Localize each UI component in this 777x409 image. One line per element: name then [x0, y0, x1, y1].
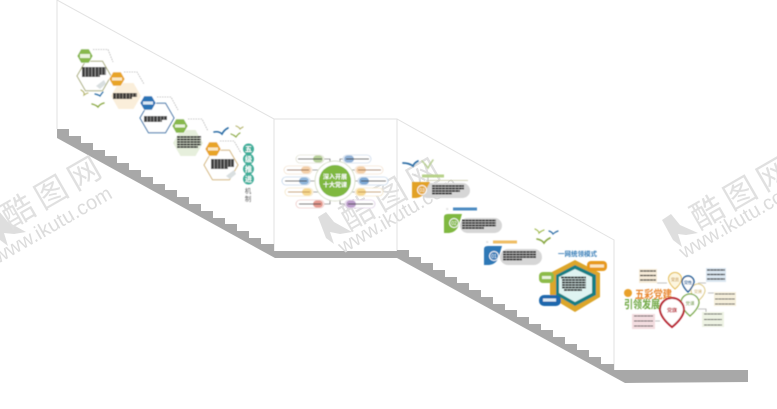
- vertical title: 进: [245, 174, 252, 184]
- vertical title: [243, 144, 254, 203]
- heading: 引领发展: [624, 297, 660, 311]
- pin: green: 党课: [686, 300, 695, 307]
- hexagon step 4: [172, 119, 208, 156]
- item 01: “: [486, 241, 489, 247]
- heading: [624, 287, 672, 311]
- text boxes: [632, 268, 736, 329]
- pin: tan: 党建: [694, 288, 702, 294]
- centre circle: 深入开展: [323, 173, 347, 181]
- connector lines: [310, 159, 358, 204]
- item 01: 01: [491, 254, 497, 260]
- hexagon step 2: [109, 72, 144, 109]
- vertical title: 级: [245, 154, 252, 164]
- panel: numbered items 03 02 01: [403, 160, 607, 312]
- watermark: centre: 酷图网: [334, 149, 451, 237]
- hexagon step 5: [204, 141, 241, 180]
- item 02: “: [446, 208, 449, 214]
- right pills: [343, 155, 388, 208]
- staircase: left flight: [57, 129, 397, 258]
- leader lines: [655, 283, 722, 321]
- item 01: [484, 240, 542, 265]
- birds: left group: [81, 90, 104, 107]
- panel: five-level hexagon mechanism: [77, 49, 254, 203]
- item 03: [412, 174, 470, 198]
- title: one network model: 一网统领模式: [558, 249, 598, 258]
- left pills: [282, 155, 324, 208]
- centre circle: 十大党课: [323, 181, 347, 189]
- watermark: centre: www.ikutu.com: [334, 173, 461, 259]
- vertical title: 推: [245, 164, 252, 174]
- vertical title: 五: [245, 146, 252, 154]
- wall outlines: [57, 0, 614, 370]
- birds: middle of panel: [535, 229, 558, 243]
- watermark: right: [662, 148, 777, 264]
- item 02: 02: [451, 221, 457, 227]
- hexagon step 1: [77, 49, 113, 91]
- item 02: [444, 208, 502, 233]
- item 03: “: [414, 174, 417, 180]
- item 03: 03: [419, 188, 425, 194]
- hexagon model: [539, 260, 607, 312]
- heading: 五彩党建: [635, 287, 672, 301]
- birds: top of panel: [403, 160, 433, 168]
- vertical title: 制: [245, 194, 252, 203]
- birds: right group: [214, 126, 243, 137]
- pin: blue: 党性: [684, 279, 692, 285]
- panel: colourful party building: [624, 268, 736, 329]
- pin: yellow: 党员: [671, 276, 679, 282]
- watermark: centre: [318, 149, 461, 259]
- centre circle: [315, 161, 355, 201]
- vertical title: 机: [245, 186, 252, 195]
- panel: ten themed party lectures: [282, 155, 388, 208]
- staircase: right flight and floor: [397, 250, 748, 383]
- hexagon step 3: [140, 96, 178, 133]
- pin: red: 党旗: [667, 307, 677, 314]
